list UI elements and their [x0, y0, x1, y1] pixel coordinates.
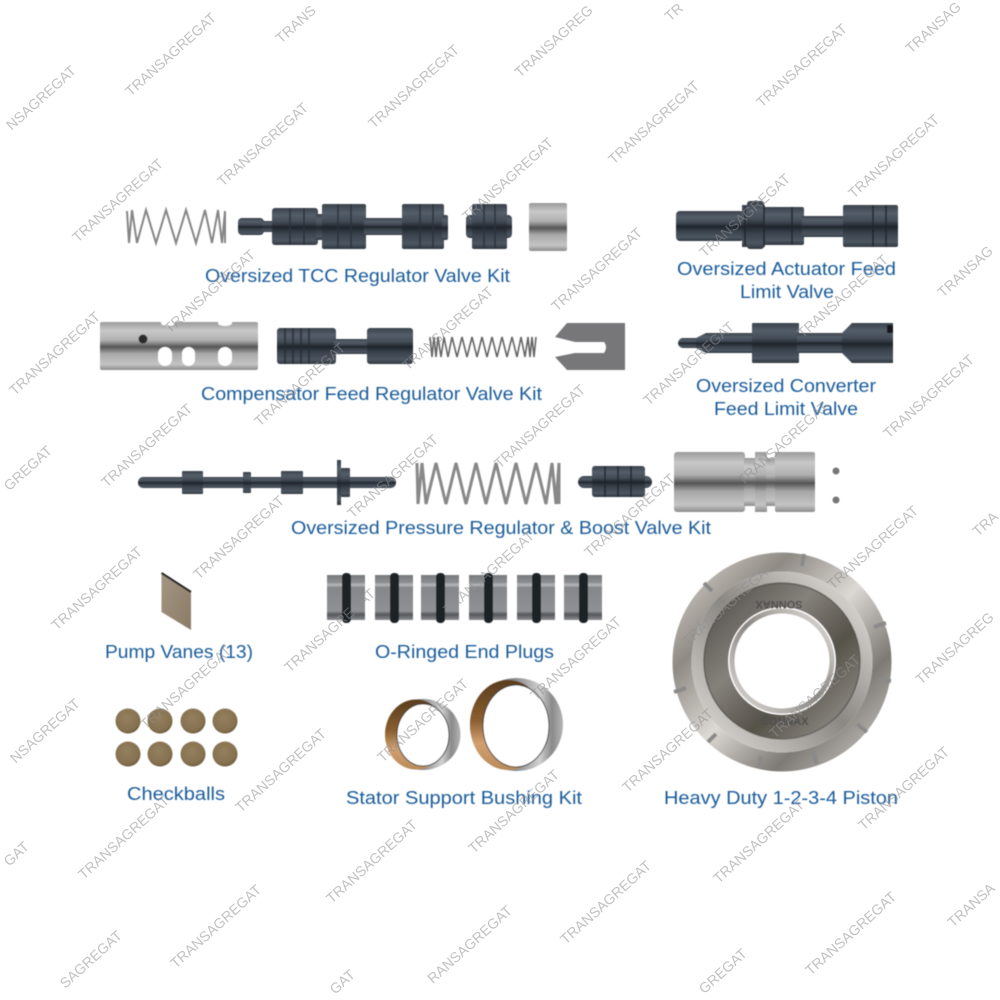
watermark layer: GREGAT: [1, 443, 56, 494]
watermark layer: TRANSAGREGAT: [558, 858, 655, 948]
watermark layer: TRANSAGREGAT: [846, 112, 943, 202]
icon: fork retainer plate: [555, 323, 625, 370]
label: piston: Heavy Duty 1-2-3-4 Piston: [664, 788, 898, 808]
watermark layer: TRANSAGREGAT: [460, 135, 557, 225]
label: actuator valve: Oversized Actuator Feed: [677, 259, 896, 279]
watermark layer: TRANSAGREGAT: [215, 100, 312, 190]
icon: end plug 4: [469, 573, 507, 623]
icon: converter valve: [678, 323, 893, 363]
label: converter valve: Oversized Converter: [696, 376, 876, 396]
watermark layer: TRANSAGREGAT: [767, 652, 864, 742]
piston stamped mark bottom: SONNAX: [761, 716, 809, 728]
icon: boost valve: [578, 466, 652, 497]
watermark layer: TRANSAGREGAT: [803, 889, 900, 979]
watermark layer: TRANS: [273, 3, 319, 47]
label: actuator valve second line: Limit Valve: [740, 282, 834, 302]
panel: Pump Vanes: [105, 573, 253, 662]
panel: Oversized TCC Regulator Valve Kit: [127, 203, 567, 286]
watermark layer: SAGREGAT: [57, 928, 126, 992]
watermark layer: TRANSAGREGAT: [528, 614, 625, 704]
icon: long pressure regulator valve: [138, 460, 396, 505]
icon: large bushing: [470, 678, 563, 771]
watermark layer: TRANSAGREGAT: [466, 767, 563, 857]
watermark layer: TRANSAGREGAT: [492, 382, 589, 472]
watermark layer: TRANSAGREGAT: [7, 309, 104, 399]
icon: ported sleeve: [100, 320, 258, 370]
panel: Oversized Pressure Regulator and Boost Valve Kit: [138, 452, 840, 538]
icon: small bushing: [385, 699, 460, 770]
watermark layer: TRANSAGREGAT: [856, 744, 953, 834]
watermark layer: TRANSAGREGAT: [697, 171, 794, 261]
label: TCC kit: Oversized TCC Regulator Valve Kit: [205, 266, 510, 286]
watermark layer: TRANSAG: [903, 0, 965, 57]
watermark layer: TRANSAGREGAT: [191, 493, 288, 583]
icon: checkball grid: [116, 708, 238, 766]
watermark layer: TRANSAGREGAT: [138, 643, 235, 733]
watermark layer: TRANSAGREGAT: [123, 10, 220, 100]
watermark layer: TRANSAGREGAT: [282, 586, 379, 676]
icon: compensator valve: [277, 328, 413, 364]
icon: end plug 2: [375, 573, 413, 623]
watermark layer: TRANSAGREGAT: [680, 560, 777, 650]
watermark layer: TRANSAGREGAT: [49, 544, 146, 634]
panel: O-Ringed End Plugs: [327, 573, 602, 662]
panel: Stator Support Bushing Kit: [346, 678, 582, 808]
panel: Compensator Feed Regulator Valve Kit: [100, 320, 625, 404]
watermark layer: TRANSAGREG: [512, 3, 596, 81]
watermark layer: RANSAGREGAT: [425, 903, 516, 987]
watermark layer: TRANSAGREGAT: [324, 817, 421, 907]
panel: Heavy Duty 1-2-3-4 Piston: [664, 554, 898, 808]
icon: large gray spring: [417, 463, 559, 504]
watermark layer: TRANSAGREGAT: [366, 42, 463, 132]
icon: end plug 3: [421, 573, 459, 623]
watermark layer: TRANSAGREGAT: [375, 676, 472, 766]
watermark layer: TR: [662, 0, 687, 25]
icon: end plug 1: [327, 573, 365, 623]
panel: Oversized Converter Feed Limit Valve: [678, 323, 893, 419]
watermark layer: TRANSAGREGAT: [795, 252, 892, 342]
panel: Oversized Actuator Feed Limit Valve: [676, 201, 898, 302]
watermark layer: GAT: [1, 839, 33, 870]
icon: TCC regulator valve: [238, 204, 448, 249]
watermark layer: TRANSAGREGAT: [754, 21, 851, 111]
icon: pump vane: [162, 573, 191, 630]
watermark layer: NSAGREGAT: [4, 63, 80, 134]
label: pressure regulator kit: Oversized Pressure Regulator & Boost Valve Kit: [291, 518, 711, 538]
watermark layer: TRANSAGREGAT: [441, 528, 538, 618]
piston stamped mark top: SONNAX: [755, 598, 803, 610]
icon: actuator valve: [676, 201, 898, 249]
watermark layer: TRANSAGREGAT: [233, 726, 330, 816]
watermark layer: TRANSAGREGAT: [881, 352, 978, 442]
watermark layer: GAT: [327, 967, 359, 998]
watermark layer: TRANSAGREGAT: [168, 882, 265, 972]
watermark layer: TRANSAGREGAT: [620, 706, 717, 796]
watermark layer: TRANSAGREGAT: [345, 432, 442, 522]
watermark layer: TRANSAGREGAT: [76, 793, 173, 883]
watermark layer: GREGAT: [696, 946, 751, 997]
watermark layer: TRANSAGREGAT: [711, 797, 808, 887]
label: bushing kit: Stator Support Bushing Kit: [346, 788, 582, 808]
icon: TCC spring: [127, 210, 225, 243]
watermark layer: TRANSAGREG: [913, 610, 997, 688]
watermark layer: TRANSAGREGAT: [549, 225, 646, 315]
watermark layer: TRANSAGREGAT: [606, 78, 703, 168]
label: checkballs: Checkballs: [127, 784, 225, 804]
label: end plugs: O-Ringed End Plugs: [375, 642, 554, 662]
watermark layer: TRANSA: [945, 880, 999, 931]
icon: small pins: [832, 468, 840, 504]
watermark layer: TRANSAGREGAT: [735, 399, 832, 489]
label: pump vanes: Pump Vanes (13): [105, 642, 253, 662]
watermark layer: TRANSAGREGAT: [252, 340, 349, 430]
watermark layer: TRANSAGREGAT: [825, 503, 922, 593]
panel: Checkballs: [116, 708, 238, 804]
label: compensator kit: Compensator Feed Regulator Valve Kit: [201, 384, 542, 404]
icon: short valve: [466, 204, 512, 249]
watermark layer: TRANSAGREGAT: [70, 156, 167, 246]
watermark layer: TRANSAGREGAT: [400, 284, 497, 374]
icon: piston disc: [674, 554, 891, 768]
watermark layer: TRANSAG: [935, 243, 997, 301]
watermark layer: TRANSAGREGAT: [641, 319, 738, 409]
icon: end plug 6: [564, 573, 602, 623]
watermark layer: TRANSAGREGAT: [99, 401, 196, 491]
icon: end plug 5: [517, 573, 555, 623]
icon: silver end sleeve: [529, 203, 567, 251]
icon: long fine spring: [430, 337, 536, 357]
watermark layer: TRANSAGREGAT: [162, 247, 259, 337]
watermark layer: NSAGREGAT: [8, 696, 84, 767]
label: converter valve second line: Feed Limit Valve: [714, 399, 858, 419]
watermark layer: TRANSAGREGAT: [582, 471, 679, 561]
icon: large valve sleeve: [674, 452, 815, 512]
